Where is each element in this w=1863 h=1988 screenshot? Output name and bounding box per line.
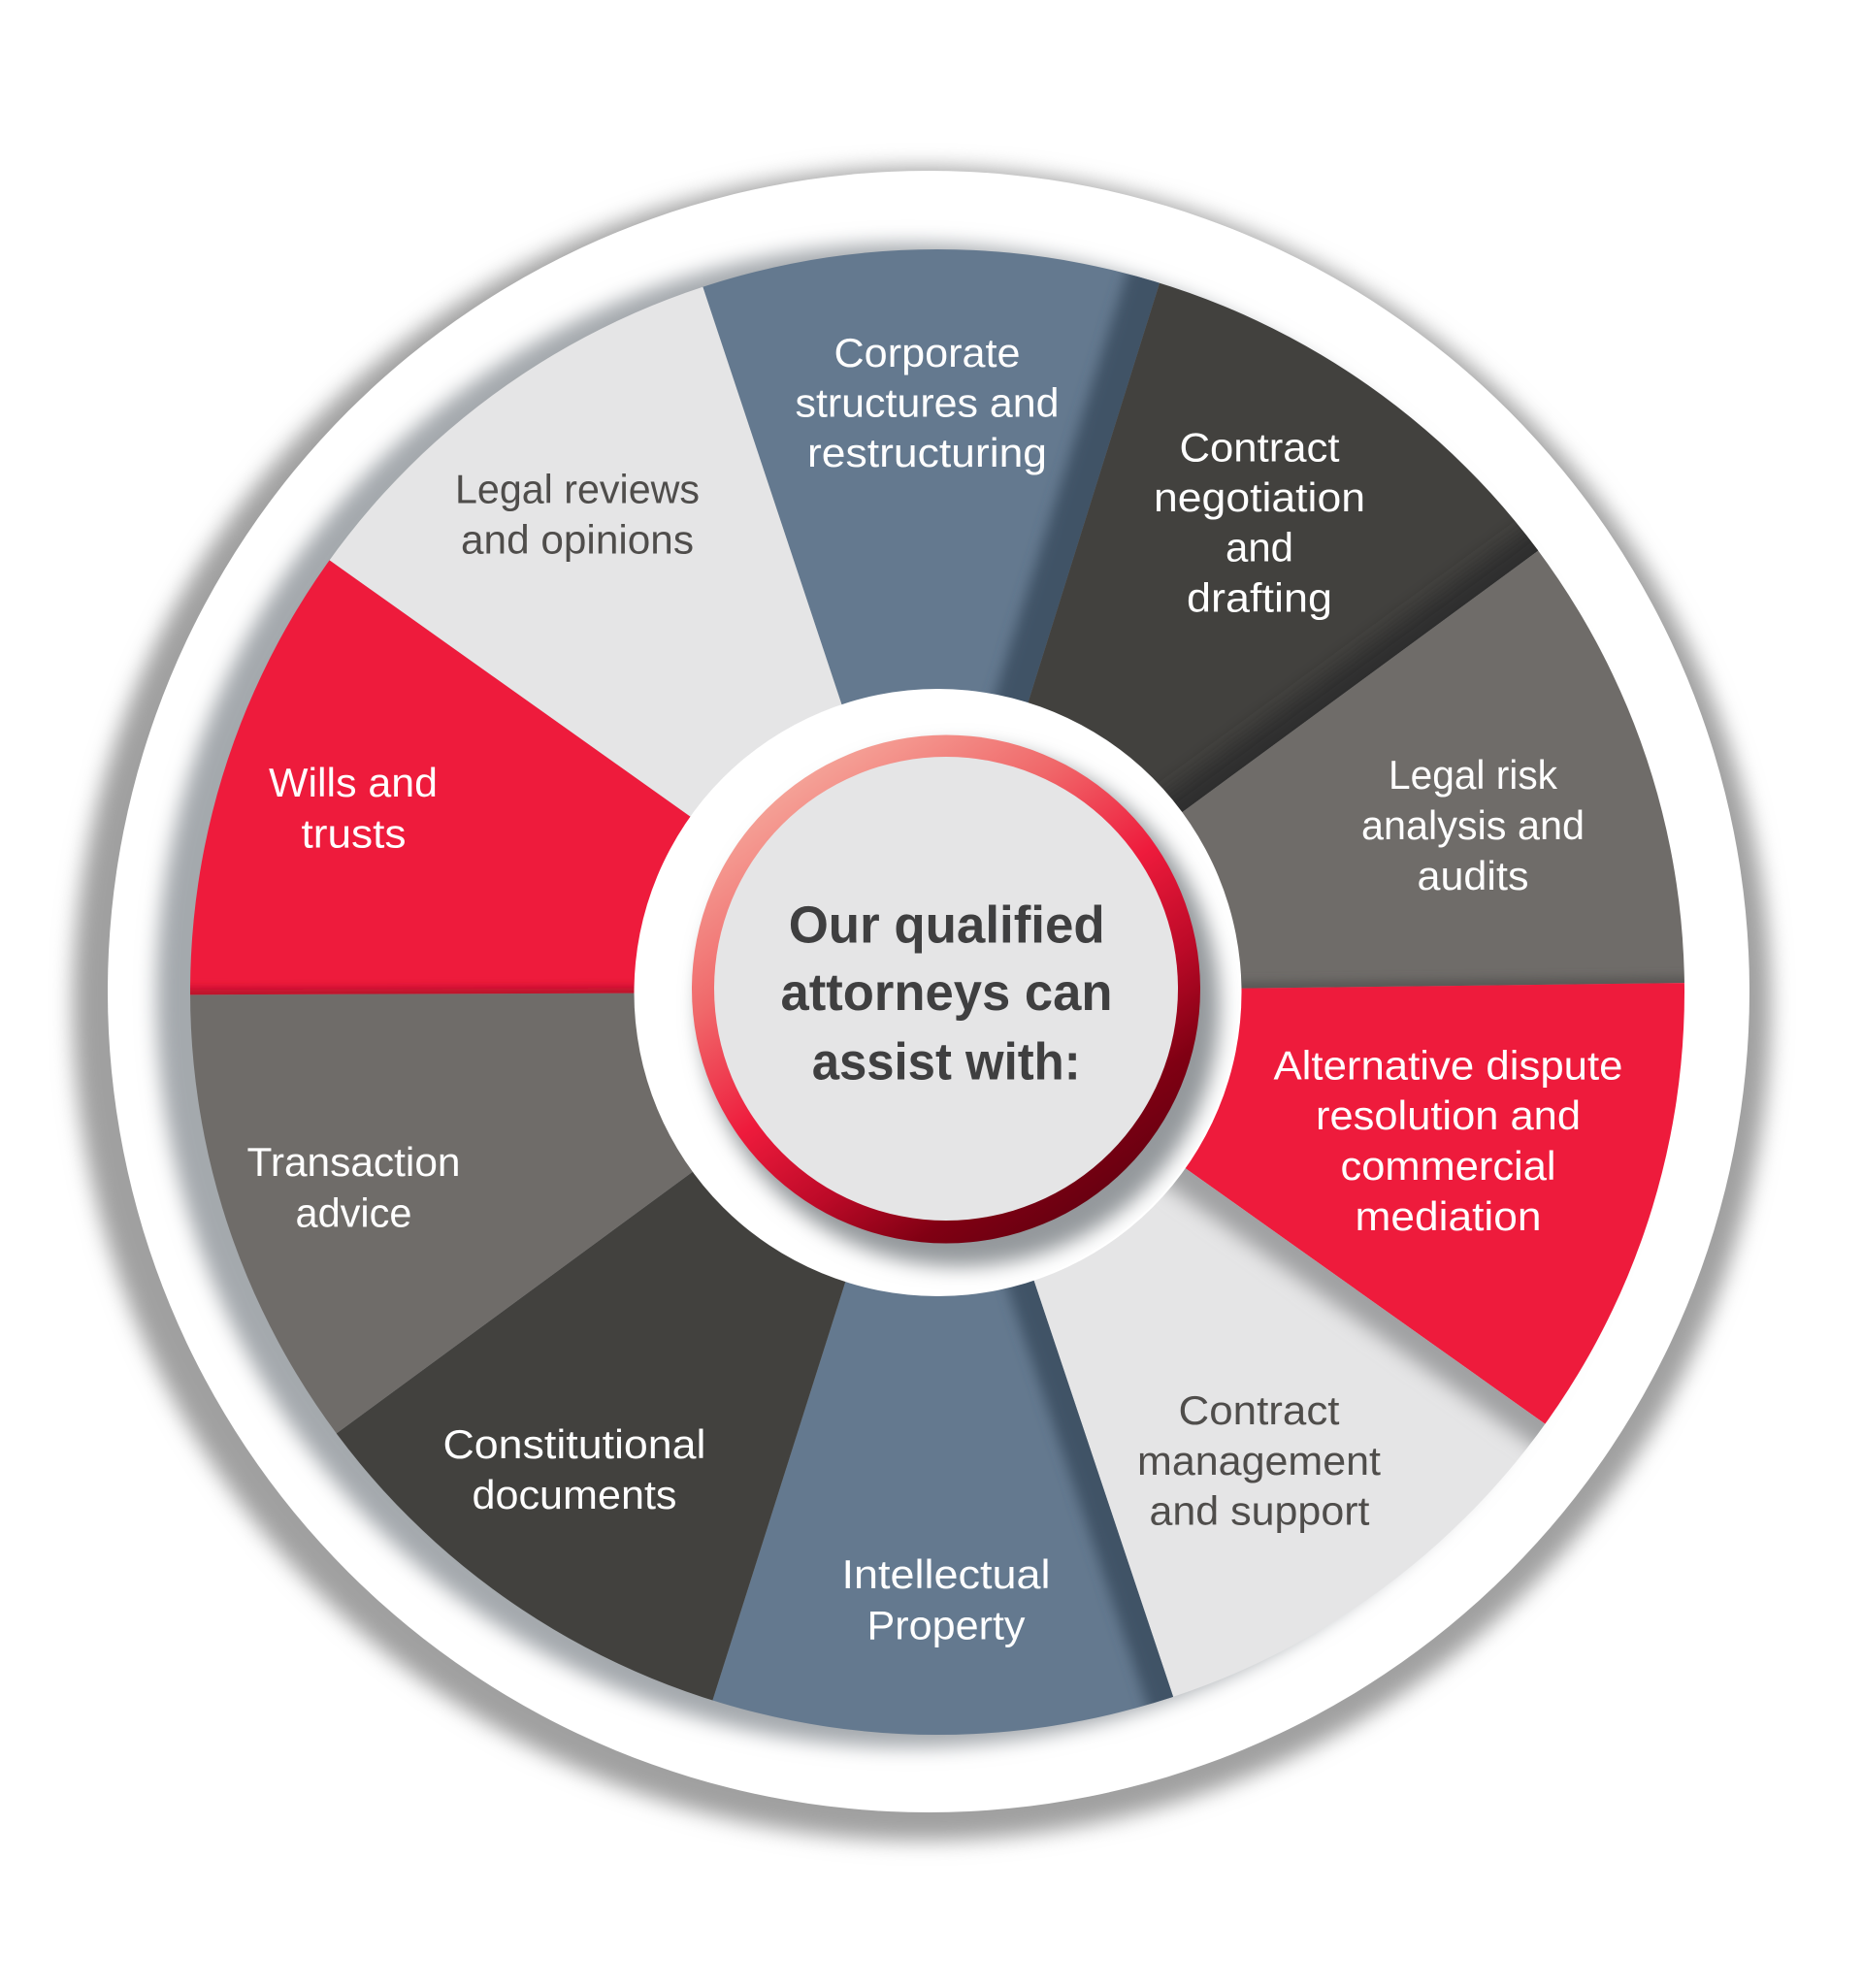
label: contract management: Contract [1178, 1387, 1340, 1433]
label: alternative dispute resolution [1273, 1042, 1622, 1239]
label: contract negotiation: and [1226, 524, 1293, 570]
label: intellectual property: Intellectual [842, 1551, 1050, 1597]
red gradient ring [692, 735, 1200, 1244]
wheel infographic [59, 154, 1784, 1854]
label: intellectual property: Property [867, 1603, 1025, 1647]
wedge: corporate structures [703, 249, 1160, 704]
centre heading: Our qualified [789, 896, 1105, 955]
label: alternative dispute resolution: Alternative dispute [1273, 1042, 1622, 1089]
wedge: legal risk [1182, 551, 1684, 989]
label: legal reviews: Legal reviews [455, 466, 700, 512]
centre heading [780, 896, 1112, 1091]
wedge: constitutional documents [336, 1172, 846, 1700]
label: contract negotiation: Contract [1180, 425, 1340, 470]
wedge: alternative dispute resolution [1186, 983, 1684, 1424]
label: constitutional documents [442, 1421, 706, 1517]
label: contract negotiation: drafting [1187, 574, 1332, 621]
label: corporate structures: structures and [796, 380, 1060, 425]
label: alternative dispute resolution: mediation [1355, 1193, 1541, 1239]
label: alternative dispute resolution: commercial [1341, 1143, 1556, 1189]
label: legal reviews: and opinions [461, 516, 694, 563]
white hub ring [635, 689, 1242, 1296]
centre heading: assist with: [812, 1032, 1081, 1091]
label: corporate structures: Corporate [834, 330, 1021, 375]
label: contract management: and support [1149, 1488, 1370, 1533]
label: constitutional documents: documents [472, 1472, 677, 1517]
wedge: wills and trusts [190, 561, 691, 995]
label: legal reviews [455, 466, 700, 563]
wedge ring [190, 249, 1684, 1735]
label: wills and trusts: trusts [301, 811, 406, 856]
label: wills and trusts: Wills and [269, 760, 438, 805]
label: transaction advice [246, 1139, 460, 1236]
label: legal risk [1361, 752, 1585, 898]
label: contract negotiation [1154, 425, 1365, 621]
outer drop shadow [73, 168, 1771, 1841]
shadow of wedge disc [156, 244, 1660, 1747]
wedge: transaction advice [190, 994, 693, 1434]
centre disc [714, 757, 1178, 1221]
label: contract negotiation: negotiation [1154, 474, 1365, 520]
label: contract management: management [1137, 1438, 1381, 1483]
label: alternative dispute resolution: resolution and [1316, 1092, 1581, 1138]
label: contract management [1137, 1387, 1381, 1533]
label: transaction advice: advice [295, 1190, 411, 1236]
label: corporate structures [796, 330, 1060, 475]
label: wills and trusts [269, 760, 438, 856]
outer white disc [108, 171, 1749, 1812]
wedge: legal reviews [330, 287, 842, 817]
label: legal risk: audits [1417, 853, 1529, 898]
label: intellectual property [842, 1551, 1050, 1647]
wedge: intellectual property [712, 1281, 1174, 1735]
wedge: contract management [1034, 1168, 1545, 1697]
label: transaction advice: Transaction [246, 1139, 460, 1185]
label: constitutional documents: Constitutional [442, 1421, 706, 1467]
centre heading: attorneys can [780, 963, 1112, 1022]
label: legal risk: Legal risk [1389, 752, 1558, 798]
label: legal risk: analysis and [1361, 802, 1585, 848]
shadow of red ring on hub [700, 747, 1220, 1267]
wedge: contract negotiation [1029, 283, 1539, 812]
label: corporate structures: restructuring [807, 430, 1047, 475]
